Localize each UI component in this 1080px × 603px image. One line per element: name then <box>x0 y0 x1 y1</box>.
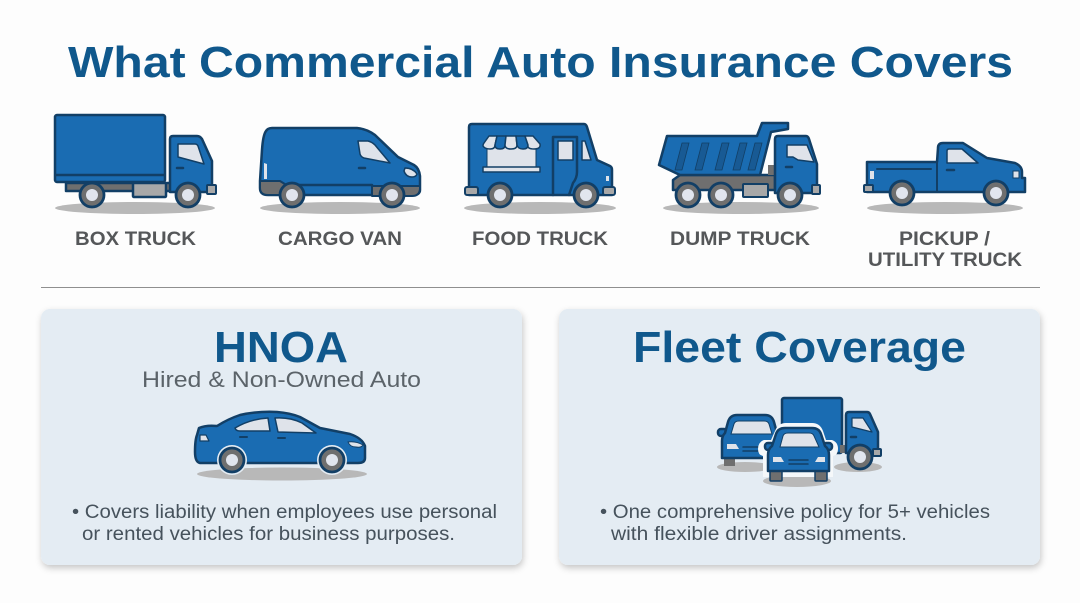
vehicle: box truck <box>55 115 216 250</box>
body text: HNOA <box>72 502 497 545</box>
vehicle: dump truck <box>659 123 820 250</box>
vehicle: food truck <box>464 124 616 250</box>
vehicle: cargo van <box>260 128 420 250</box>
icon: dump truck <box>659 123 820 214</box>
heading: HNOA: HNOA <box>214 323 348 372</box>
icon: sedan <box>195 412 367 480</box>
icon: food truck <box>464 124 616 214</box>
label: cargo van: CARGO VAN <box>278 229 402 250</box>
title: What Commercial Auto Insurance Covers <box>68 38 1013 87</box>
icon: box truck <box>55 115 216 214</box>
label: dump truck: DUMP TRUCK <box>670 229 810 250</box>
icon: fleet of vehicles <box>717 398 882 487</box>
body text: fleet coverage: with flexible driver assignments. <box>610 524 907 545</box>
body text: fleet coverage <box>600 502 990 545</box>
body text: HNOA: or rented vehicles for business purposes. <box>82 524 455 545</box>
icon: pickup truck <box>864 143 1025 214</box>
label: pickup utility truck <box>868 229 1022 271</box>
panel: fleet coverage <box>559 309 1040 565</box>
subheading: Hired & Non-Owned Auto <box>142 367 421 392</box>
icon: cargo van <box>260 128 420 214</box>
panel: HNOA <box>41 309 522 565</box>
label: food truck: FOOD TRUCK <box>472 229 608 250</box>
label: pickup utility truck: UTILITY TRUCK <box>868 250 1022 271</box>
heading: fleet coverage: Fleet Coverage <box>633 323 966 372</box>
body text: fleet coverage: • One comprehensive policy for 5+ vehicles <box>600 502 990 523</box>
body text: HNOA: • Covers liability when employees use personal <box>72 502 497 523</box>
label: pickup utility truck: PICKUP / <box>899 229 991 250</box>
label: box truck: BOX TRUCK <box>75 229 196 250</box>
vehicle: pickup truck <box>864 143 1025 271</box>
